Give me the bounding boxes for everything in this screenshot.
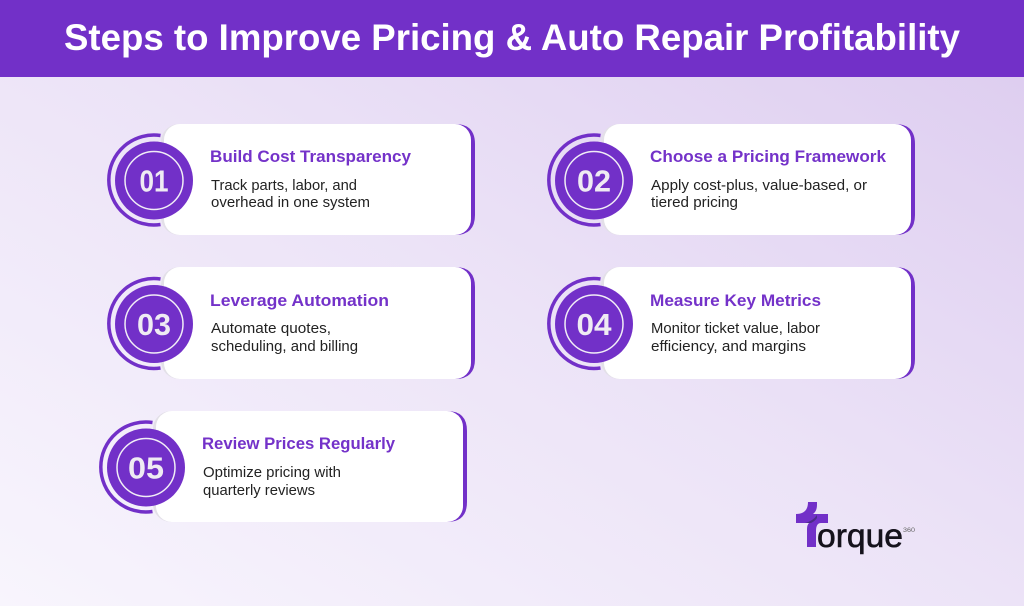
step 04 card: Measure Key Metrics [650,291,821,310]
step 02 card: Apply cost-plus, value-based, or [651,178,867,194]
header banner [0,0,1024,77]
icon: logo T mark [796,502,828,547]
step 01 card: Build Cost Transparency [210,147,412,166]
step 03 card: 03 [137,307,171,342]
step 03 card [109,267,475,379]
step 04 card [549,267,915,379]
step 04 card: efficiency, and margins [651,339,806,355]
step 04 card: 04 [576,307,612,342]
step 05 card: Optimize pricing with [203,465,341,481]
step 02 card: Choose a Pricing Framework [650,147,887,166]
step 05 card: quarterly reviews [203,483,315,499]
step 04 card: Monitor ticket value, labor [651,321,820,337]
step 03 card: Automate quotes, [211,321,331,337]
step 01 card: Track parts, labor, and [211,178,357,194]
step 02 card: tiered pricing [651,195,738,211]
step 05 card [101,411,467,522]
step 02 card [549,124,915,235]
step 05 card: 05 [128,450,164,486]
step 02 card: 02 [577,164,611,198]
title: Steps to Improve Pricing & Auto Repair Profitability [64,17,960,58]
step 03 card: Leverage Automation [210,291,389,310]
step 01 card: overhead in one system [211,195,370,211]
logo: Torque 360 [796,502,915,554]
step 03 card: scheduling, and billing [211,339,358,355]
step 01 card [109,124,475,235]
step 01 card: 01 [140,164,168,198]
logo: Torque 360: orque [817,517,903,554]
logo: Torque 360: 360 [903,527,915,534]
step 05 card: Review Prices Regularly [202,434,396,453]
